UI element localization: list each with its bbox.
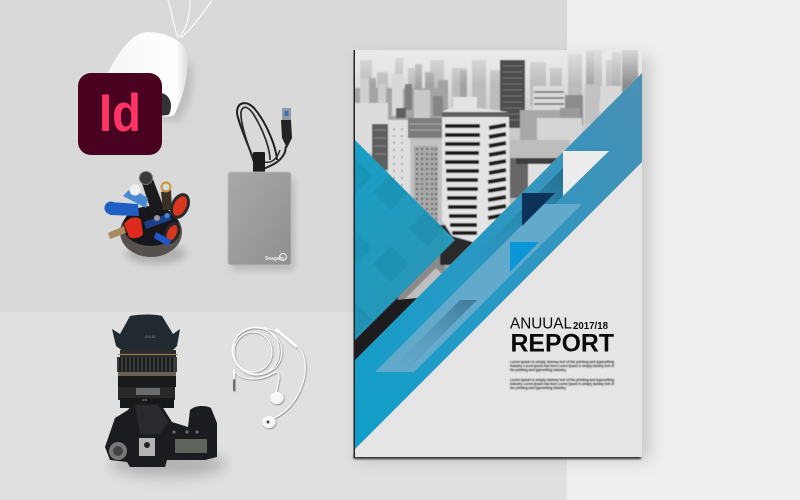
icon: InDesign logo (78, 73, 162, 155)
camera: EOS (142, 399, 148, 402)
black sliver (355, 298, 417, 360)
mid-distance district (354, 74, 444, 120)
body text: industry. Lorem Ipsum has been Lorem Ipsum is simply dummy text of (510, 363, 615, 368)
camera: EW-83 (145, 335, 156, 339)
panel: annual report brochure (354, 50, 650, 460)
title: 2017/18 (573, 321, 608, 332)
body text (510, 359, 615, 390)
camera (105, 314, 226, 477)
left blue triangle (355, 140, 455, 340)
earphones (227, 322, 305, 428)
navy triangle (522, 193, 555, 226)
foreground apartment tower (442, 97, 510, 244)
body text: Lorem Ipsum is simply dummy text of the printing and typesetting (510, 359, 614, 364)
title: REPORT (510, 330, 614, 358)
dark band accent (388, 300, 477, 372)
external hard drive (228, 172, 294, 270)
blue diagonal band (355, 73, 642, 449)
icon: InDesign logo: Id (99, 84, 141, 143)
body text: the printing and typesetting industry (510, 367, 567, 372)
body text: the printing and typesetting industry (510, 385, 567, 390)
cable (237, 103, 292, 172)
light translucent band (375, 204, 582, 372)
dark tower (500, 60, 525, 128)
white triangle (563, 151, 609, 196)
city photo (354, 50, 642, 370)
lamp object (108, 0, 212, 122)
darker band strip (454, 168, 563, 277)
brochure page (354, 50, 642, 457)
title (510, 316, 614, 358)
body text: Lorem Ipsum is simply dummy text of the printing and typesetting (510, 377, 614, 382)
left spine edge (354, 50, 355, 458)
brochure shadow (354, 56, 650, 460)
external hard drive: Seagate (265, 256, 284, 262)
title: ANUUAL (510, 316, 572, 332)
body text: industry. Lorem Ipsum has been Lorem Ipsum is simply dummy text of (510, 381, 615, 386)
bright blue triangle (510, 242, 539, 272)
pen holder (104, 172, 192, 264)
